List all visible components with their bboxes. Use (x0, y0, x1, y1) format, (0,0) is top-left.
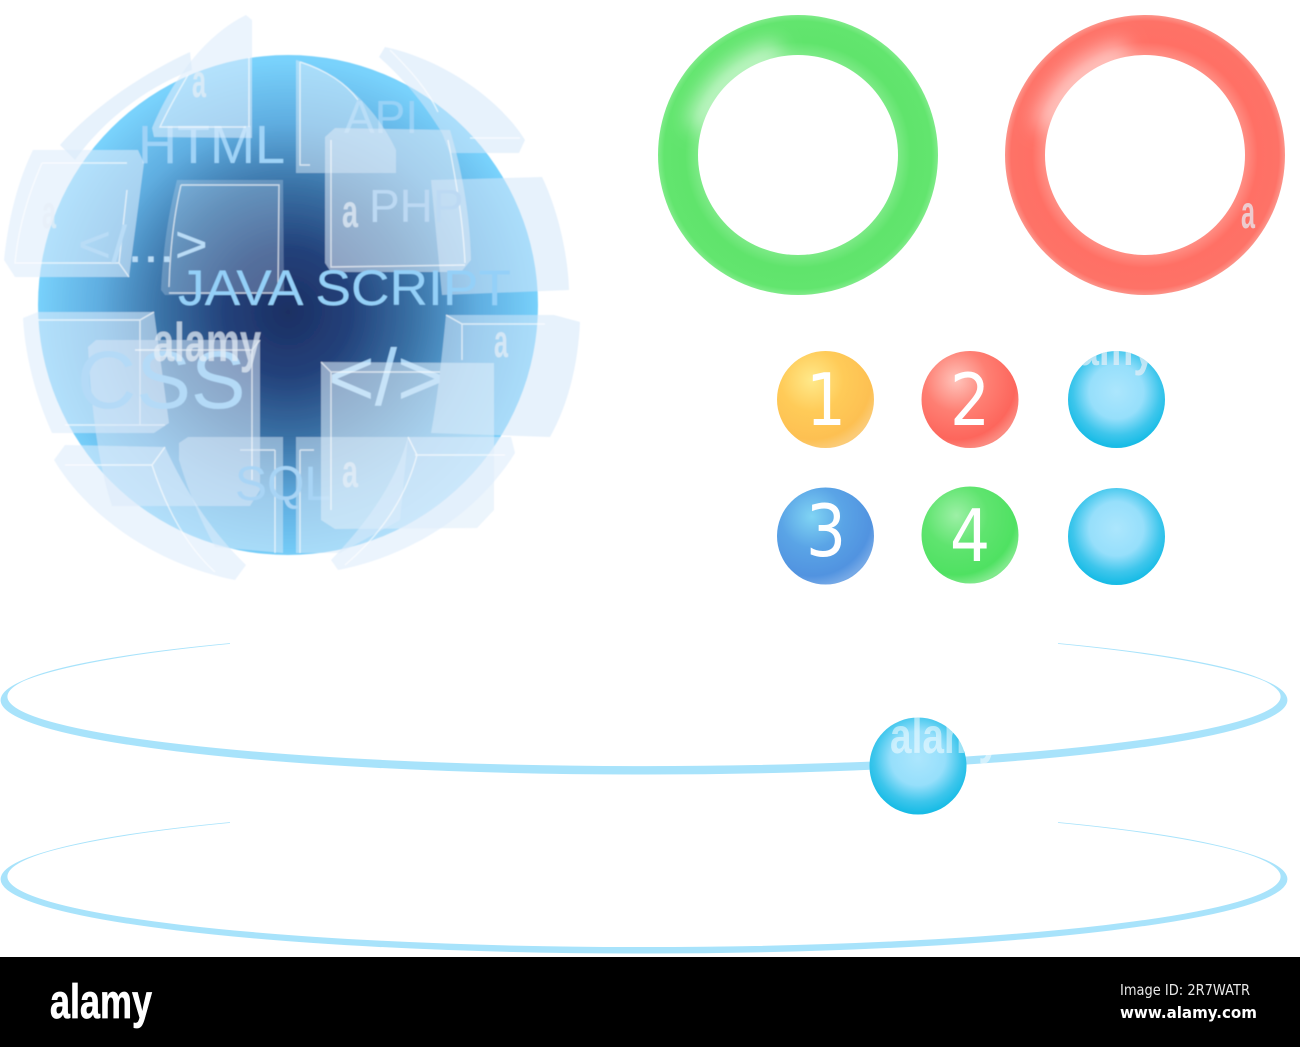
watermark letters on globe: alamy (153, 311, 261, 373)
tile: top left (152, 15, 252, 138)
ball 3 blue: 3 (806, 489, 846, 573)
ball 1 yellow (777, 351, 874, 448)
watermark letters on globe: a (494, 315, 508, 367)
ball 2 red: 2 (950, 358, 990, 442)
ball 2 red (922, 351, 1018, 448)
tile: closing tag (321, 362, 494, 529)
tile: PHP (325, 128, 471, 272)
orbit marker ball (870, 708, 1000, 814)
footer bar (0, 957, 1300, 1047)
image id: Image ID: 2R7WATR (1120, 981, 1250, 999)
red ring (1005, 15, 1285, 295)
watermark letters on globe: a (342, 185, 358, 237)
tile: bottom right arc (331, 437, 515, 570)
globe of web technologies (4, 15, 580, 580)
orbit ellipse upper (1, 644, 1287, 774)
label: code ellipsis tag: </...> (78, 216, 208, 274)
ball 4 green: 4 (950, 494, 990, 578)
label: JAVA SCRIPT: JAVA SCRIPT (178, 260, 511, 316)
tile: CSS (88, 340, 260, 506)
globe sphere (38, 55, 538, 555)
tile: left lower (23, 312, 169, 433)
tile: top left back glass (60, 52, 192, 160)
tile: top middle (296, 60, 396, 173)
tile: left upper (4, 150, 144, 277)
ball plain blue upper: alamy (1045, 320, 1155, 376)
ball plain blue lower (1068, 488, 1165, 585)
orbit marker ball: alamy (890, 708, 1000, 764)
website: www.alamy.com (1120, 1003, 1257, 1022)
label: API: API (344, 91, 418, 143)
ball 3 blue (777, 488, 874, 584)
tile: bottom left arc (54, 445, 246, 580)
label: CSS: CSS (77, 335, 246, 426)
tile: right upper (431, 177, 569, 295)
red ring: a (1241, 186, 1255, 238)
tile: bottom centre right (240, 437, 408, 553)
watermark letters on globe (42, 55, 508, 497)
green ring (658, 15, 938, 295)
ball 1 yellow: 1 (806, 358, 846, 442)
watermark letters on globe: a (342, 445, 358, 497)
ball 4 green (922, 486, 1018, 584)
footer logo: alamy (50, 976, 152, 1029)
label: SQL: SQL (235, 458, 331, 511)
watermark letters on globe: a (192, 55, 206, 107)
ball plain blue upper (1068, 351, 1165, 448)
label: HTML: HTML (138, 115, 285, 175)
tile: bottom centre left (179, 437, 283, 553)
label: PHP: PHP (369, 180, 464, 232)
watermark letters on globe: a (42, 186, 56, 238)
tile: top right (379, 47, 525, 153)
orbit ellipse lower (1, 822, 1287, 953)
tile: right lower (431, 315, 580, 437)
label: closing tag: </> (328, 333, 444, 422)
tile: centre (161, 180, 284, 295)
